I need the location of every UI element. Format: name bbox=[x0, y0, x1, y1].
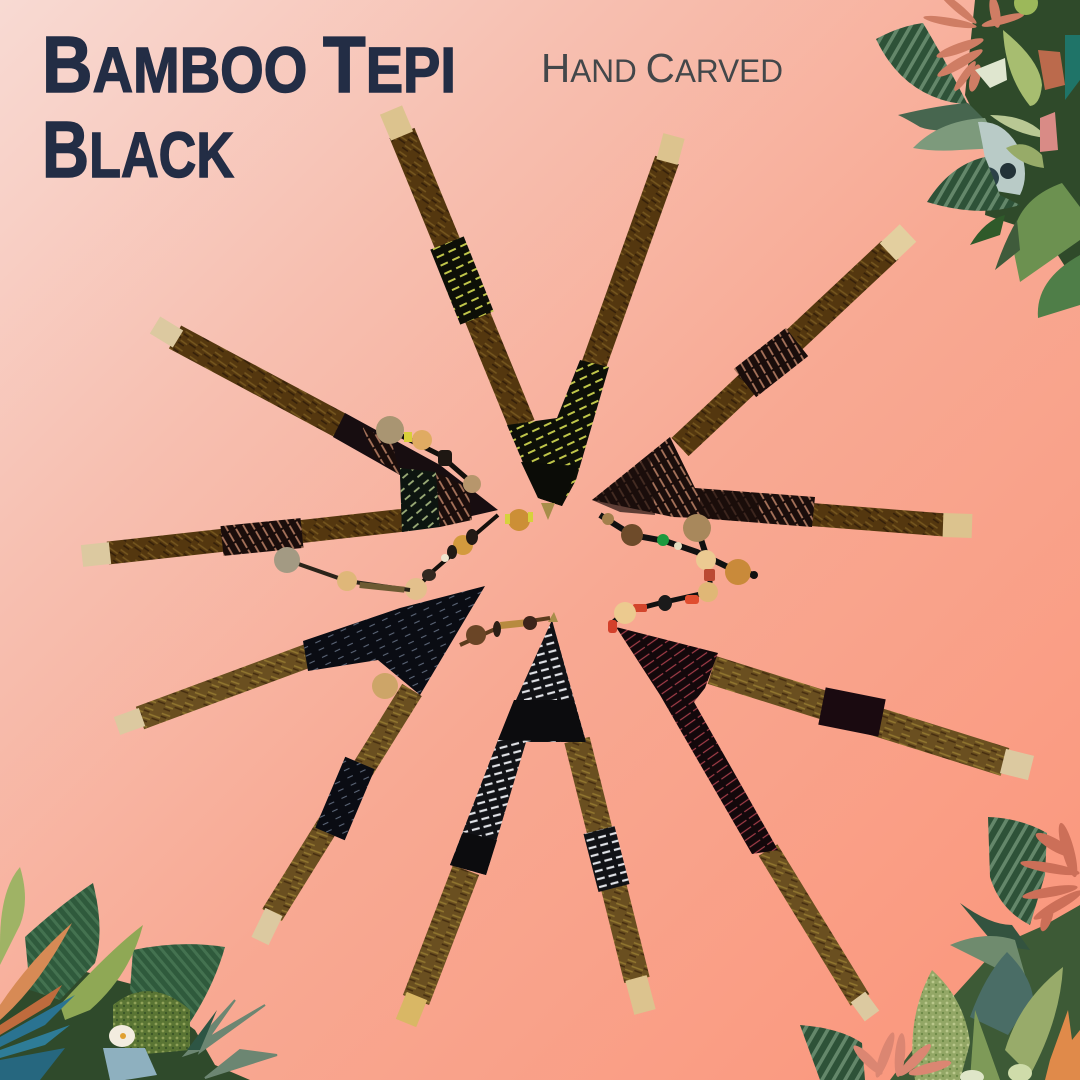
wrapped triangle bbox=[333, 413, 498, 532]
wrapped triangle bbox=[303, 586, 485, 695]
stick pair: black wrap, lower left bbox=[117, 586, 485, 941]
right stick bbox=[592, 136, 674, 370]
title: BLACK bbox=[42, 105, 234, 194]
right arm bbox=[712, 670, 1031, 768]
right arm bbox=[577, 740, 645, 1012]
lower arm bbox=[805, 514, 972, 526]
title bbox=[42, 20, 456, 194]
lower arm bbox=[768, 850, 872, 1016]
stick pair: yellow wrap, top bbox=[391, 110, 674, 520]
wrapped triangle bbox=[450, 620, 586, 875]
foliage: bottom left corner bbox=[0, 867, 277, 1080]
wrapped triangle bbox=[616, 627, 778, 854]
upper arm bbox=[680, 233, 908, 447]
stick pair: white wrap, bottom bbox=[406, 612, 645, 1023]
subtitle: hand carved: HAND CARVED bbox=[541, 45, 783, 91]
foliage: bottom right corner bbox=[800, 817, 1080, 1080]
title: BAMBOO TEPI bbox=[42, 20, 456, 109]
bead string: far left bbox=[274, 547, 410, 593]
bead string: lower centre bbox=[372, 616, 550, 699]
bead string: right upper bbox=[600, 513, 758, 585]
left arm bbox=[117, 655, 310, 726]
stick pair: red wrap, lower right bbox=[616, 627, 1031, 1016]
wrapped triangle bbox=[507, 360, 609, 506]
left arm bbox=[406, 870, 466, 1023]
lower arm bbox=[260, 690, 412, 941]
foliage: top right corner bbox=[876, 0, 1080, 318]
upper arm bbox=[155, 325, 345, 428]
lower arm bbox=[82, 520, 405, 556]
stick pair: multicolour wrap, left bbox=[82, 325, 498, 556]
bead string: upper left bbox=[376, 416, 533, 531]
stick pair: copper wrap, upper right bbox=[592, 233, 972, 527]
wrapped triangle bbox=[592, 437, 815, 527]
left stick bbox=[391, 110, 522, 425]
bead string: centre left bbox=[405, 515, 498, 600]
bead string: right lower bbox=[608, 569, 718, 633]
